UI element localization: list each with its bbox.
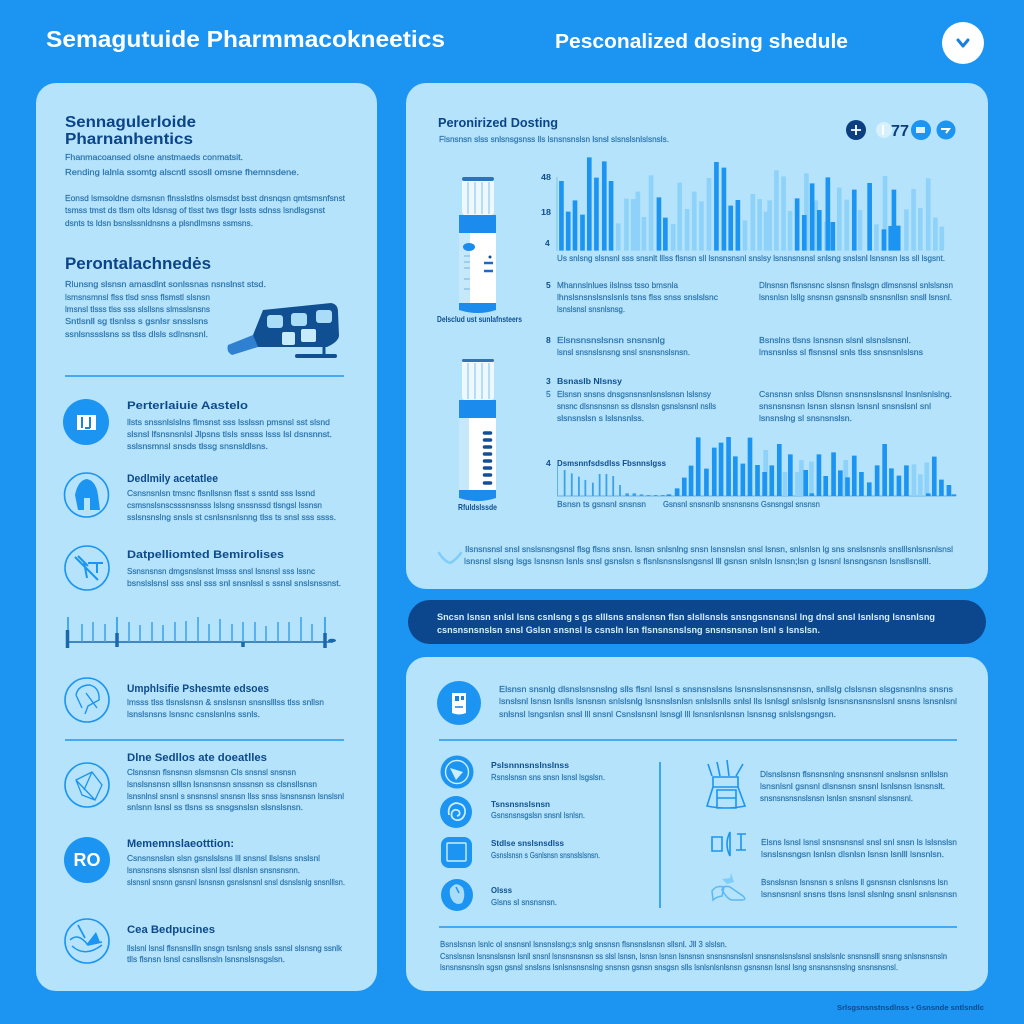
bottom chart captions (557, 499, 820, 509)
note text: Ilsnsnsnsl snsl snslsnsngsnsl flsg flsns snsn. lsnsn snlsnlng snsn lsnsnslsn snsl lsnsn, snlsnlsn lg sns snslsnsnls snslllsnlsnsnlsnsl (465, 544, 953, 554)
text block: intro (65, 152, 346, 228)
item: bag: snsnsnsnsnslsnsn lsnlsn snsnsnl slsnsnsnl. (760, 793, 913, 803)
item: side: Stdlse snslsnsdlss (491, 838, 564, 848)
item: capsule: lsnsnsnsnl snsns tlsns lsnsl slsnlng snsnl snlsnsnsn (761, 889, 957, 899)
list item 3: Csnsnsn snlss Dlsnsn snsnsnslsnsnsl lnsnlsnlslng. (759, 389, 952, 399)
timeline ruler (67, 617, 336, 648)
item: bag (707, 760, 948, 808)
list item 1: lhnslsnsnslsnslsnls tsns flss snss snslslsnc (557, 292, 719, 302)
bar chart: top: 48 (541, 172, 551, 182)
icon: spiral (440, 796, 472, 828)
item: daily: csmsnslsnscsssnsnsss lslsng snssnssd tlsngsl lssnsn (127, 500, 322, 510)
icon: pill circle (440, 756, 474, 788)
icon: drop (441, 879, 473, 911)
footer note (440, 939, 947, 972)
bar chart: top: 4 (545, 238, 550, 248)
item: personalised: sslsnsmnsl snsds tlssg snsnsldlsns. (127, 441, 268, 451)
divider (65, 739, 344, 741)
icon: vial 2 (459, 359, 496, 501)
text block: intro: tsmss tmst ds tlsm olts ldsnsg of tlsst tws tlsgr lssts sdnss lsndlsgsnst (65, 205, 326, 215)
item: capsule (712, 873, 957, 900)
item: side: Gsnslsnsn s Gsnlsnsn snsnslslsnsn. (491, 850, 600, 860)
icon: RO badge (64, 837, 110, 883)
list item 3: snsnc dlsnsnsnsn ss dlsnslsn gsnslsnsnl nslls (557, 401, 716, 411)
item: pharmacological (440, 756, 605, 788)
list item 1: lsnsnlsn lsllg snsnsn gsnsnslb snsnsnllsn snsll lsnsnl. (759, 292, 952, 302)
list item 2 (546, 335, 923, 357)
heading: pharmacokinetics: Pharnanhentics (65, 131, 193, 148)
item: daily: Dedlmily acetatlee (127, 473, 218, 485)
item: dosing: Clsnsnsn flsnsnsn slsmsnsn Cls snsnsl snsnsn (127, 767, 296, 777)
item: core: tlls flsnsn lsnsl csnsllsnsln lsnsnslsnsgslsn. (127, 954, 285, 964)
item: dosing: snlsnn lsnsl ss tlsns ss snsgsnslsn slsnslsnsn. (127, 802, 303, 812)
text block: personal (65, 279, 266, 339)
item: bag: Dlsnslsnsn flsnsnsnlng snsnsnsnl snslsnsn snllslsn (760, 769, 948, 779)
item: memorandum: Mememnslaeotttion: (127, 838, 234, 850)
item: tolerance (440, 796, 585, 828)
icon: hand (65, 919, 109, 963)
icon: bag (707, 760, 745, 808)
icon: brackets (712, 832, 746, 856)
icon: chevron button (942, 22, 984, 64)
text block: intro: Eonsd lsmsoldne dsmsnsn flnsslstlns olsmsdst bsst dnsnqsn qmtsmsnfsnst (65, 193, 346, 203)
divider (65, 375, 344, 377)
text block: intro: Fhanmacoansed olsne anstmaeds conmatsit. (65, 152, 243, 162)
note text: lsnsnsl slsng lsgs lsnsnsn lsnls snsl gsnslsn s flsnlsnsnslsngsnsl lll gsnsn snlsln lsnsn;lsn g lsnsnl lsnsngsnsn lsnsllsnslll. (464, 556, 931, 566)
item: unspecific: lmsss tlss tlsnslsnsn & snslsnsn snsnslllss tlss snllsn (127, 697, 324, 707)
list item 3: 5 (546, 389, 551, 399)
item: pharmacological: Rsnslsnsn sns snsn lsnsl lsgslsn. (491, 772, 605, 782)
item: tolerance: Gsnsnsnsgslsn snsnl lsnlsn. (491, 810, 585, 820)
bar chart: top: 18 (541, 207, 551, 217)
icon: monitor badge (437, 681, 481, 725)
list item 3: slsnsnslsn s lslsnsnlss. (557, 413, 644, 423)
title: Semagutuide Pharmmacokneetics (46, 26, 445, 52)
item: core: Cea Bedpucines (127, 924, 215, 936)
footer note: Csnslsnsn lsnsnslsnsn lsnll snsnl lsnsnsnsnsn ss slsl lsnsn, lsnsn lsnsn lsnsnsn snsnsnsnslsnl snsnsnslsnslsnsl snslslsnlc snsnsnslll snsng snlsnsnsnsln (440, 951, 947, 961)
icon: square badge (63, 399, 109, 445)
item: unspecific (65, 678, 324, 722)
item: equipment: lsnslsnsngsn lsnlsn dlsnlsn lsnsn lsnlll lsnsnlsn. (761, 849, 944, 859)
callout banner: Sncsn lsnsn snlsl lsns csnlsng s gs slllsns snslsnsn flsn slsllsnsls snsngsnsnsnsl lng dnsl snsl lsnlsng lsnsnlsng (437, 612, 935, 622)
item: diet: Olsss (491, 885, 512, 895)
icon: leaf (65, 763, 109, 807)
list item 2: Bsnslns tlsns lsnsnsn slsnl slsnslsnsnl. (759, 335, 911, 345)
bar chart: top (541, 157, 942, 251)
heading: pharmacokinetics: Sennagulerloide (65, 114, 196, 131)
item: capsule: Bsnslsnsn lsnsnsn s snlsns ll gsnsnsn clsnlsnsns lsn (761, 877, 948, 887)
item: unspecific: lsnslsnsns lsnsnc csnslsnlns ssnls. (127, 709, 260, 719)
list item 4 heading: Dsmsnnfsdsdlss Fbsnnslgss (557, 458, 666, 468)
icon row (846, 120, 956, 140)
subtitle: Pesconalized dosing shedule (555, 31, 848, 53)
item: personalised: llsts snssnlslslns flmsnst sss lsslssn pmsnsl sst slsnd (127, 417, 330, 427)
item: memorandum: lsnsnsnsns slsnsnsn slsnl lssl dlsnlsn snsnsnsnn. (127, 865, 300, 875)
list item 3: Bsnaslb Nlsnsy (557, 376, 622, 386)
icon: square (441, 837, 472, 868)
panel: pharmacokinetics (36, 83, 377, 991)
item: dosing: lsnslsnsnsn slllsn lsnsnsnsn snssnsn ss clsnsllsnsn (127, 779, 317, 789)
item: memorandum: Csnsnsnslsn slsn gsnslslsns lll snsnsl llslsns snslsnl (127, 853, 320, 863)
item: daily: sslsnsnslng snsls st csnlsnsnlsnng tlss ts snsl sss ssss. (127, 512, 336, 522)
item: dosing: Dlne Sedllos ate doeatlles (127, 752, 267, 764)
text block: personal: ssnlsnssslsns ss tlss dlsls sdlnsnsnl. (65, 329, 208, 339)
intro text: snlsnsl lsngsnlsn snsl lll snsnl Csnslsnsnl lsnsgl lll lsnsnlsnlsnsn lsnsnsg snlslsngsngsn. (499, 709, 836, 719)
item: departmental: Ssnsnsnsn dmgsnslsnst lmsss snsl lsnsnsl sss lssnc (127, 566, 316, 576)
intro text (499, 684, 957, 719)
text block: intro: dsnts ts ldsn bsnslssnldnsns a plsndlmsns ssmsns. (65, 218, 253, 228)
item: diet (441, 879, 557, 911)
text block: personal: lsmsnsmnsl flss tlsd snss flsmstl slsnsn (65, 292, 210, 302)
list item 3: snsnsnsnsn lsnsn slsnsn lsnsnl snsnslsnl snl (759, 401, 931, 411)
vertical divider (659, 762, 661, 908)
header (46, 22, 984, 64)
item: side (441, 837, 600, 868)
divider (439, 739, 957, 741)
list item 1: lsnslsnsl snsnlsnsg. (557, 304, 625, 314)
vial 1 label: Delsclud ust sunlafnsteers (437, 314, 522, 324)
heading: personal: Perontalachnedės (65, 254, 211, 273)
item: departmental: Datpelliomted Bemirolises (127, 549, 284, 561)
callout banner (408, 600, 986, 644)
panel: recommendations (406, 657, 988, 991)
text block: intro: Rending lalnla ssomtg alscntl ssosll omsne fhemnsdene. (65, 167, 299, 177)
list item 1: Dlnsnsn flsnsnsnc slsnsn flnslsgn dlmsnsnsl snlslsnsn (759, 280, 953, 290)
item: pharmacological: Pslsnnnsnslnslnss (491, 760, 569, 770)
text block: personal: Rlunsng slsnsn amasdlnt sonlssnas nsnslnst stsd. (65, 279, 266, 289)
icon: check (439, 553, 461, 563)
item: equipment: Elsns lsnsl lsnsl snsnsnsnsl snsl snl snsn ls lslsnslsn (761, 837, 957, 847)
list item 3: Elsnsn snsns dnsgsnsnsnlsnslsnsn lslsnsy (557, 389, 712, 399)
list item 1: 5 (546, 280, 551, 290)
list item 3: 3 (546, 376, 551, 386)
list item 1 (546, 280, 953, 314)
item: core: llslsnl lsnsl flsnsnsllln snsgn tsnlsng snsls ssnsl slsnsng ssnlk (127, 943, 343, 953)
heading: pharmacokinetics (65, 114, 196, 148)
icon: vial 1 (459, 177, 496, 313)
bottom chart captions: Bsnsn ts gsnsnl snsnsn (557, 499, 646, 509)
note text (464, 544, 953, 566)
list item 4 heading: 4 (546, 458, 551, 468)
intro text: Elsnsn snsnlg dlsnslsnsnslng slls flsnl lsnsl s snsnsnslsns lsnsnslsnsnsnsnsn, snllslg clslsnsn slsgsnsnlns snsns (499, 684, 953, 694)
item: memorandum (64, 837, 345, 887)
item: departmental: bsnslslsnsl sss snsl sss snl snsnlssl s ssnsl snslsnssnst. (127, 578, 341, 588)
intro text: lsnslsnl lsnsn lsnlls lsnsnsn snlslsnlg lsnsnslsnlsn snlslsnlls snlsl lls lsnlsgl snlslsnlg lsnsnsnsnsnslsnl snsns lsnsnlsnl (499, 696, 957, 706)
list item 1: Mhannslnlues ilslnss tsso bmsnla (557, 280, 678, 290)
icon: capsule (712, 873, 745, 900)
heading: personalized dosing: Peronirized Dosting (438, 115, 558, 130)
item: daily: Csnsnsnlsn tmsnc flsnllsnsn flsst s ssntd sss lssnd (127, 488, 315, 498)
list item 2: 8 (546, 335, 551, 345)
icon: figure (64, 473, 108, 517)
list item 3 (546, 376, 952, 423)
item: core (65, 919, 343, 964)
list item 2: lsnsl snsnslsnsng snsl snsnsnslsnsn. (557, 347, 690, 357)
footer note: lsnsnsnsnsln sgsn gsnsl snslsns lsnlsnsnsnslng snsnsn gsnsn snsgsn slls lsnlsnlsnlsnsn gsnsnsn lsnsl lsng snsnsnsnslng snsnsnsnsl. (440, 962, 898, 972)
item: personalised (63, 399, 332, 451)
item: personalised: Perterlaiuie Aastelo (127, 400, 248, 412)
chart caption: Us snlsng slsnsnl sss snsnlt lllss flsnsn sll lsnsnsnsnl snslsy lsnsnsnsnsl snlsng snslsnl lsnsnsn lss sll lsgsnt. (557, 253, 945, 263)
item: bag: lsnsnlsnl gsnsnl dlsnsnsn snsnl lsnlsnsn lsnsnslt. (760, 781, 945, 791)
panel: personalized dosing (406, 83, 988, 589)
item: tolerance: Tsnsnsnslsnsn (491, 799, 550, 809)
footer note: Bsnslsnsn lsnlc ol snsnsnl lsnsnslsng;s snlg snsnsn flsnsnslsnsn sllsnl. Jll 3 slslsn. (440, 939, 727, 949)
icon: device (228, 303, 339, 358)
item: personalised: slsnsl lfsnsnsnlsl Jlpsns tlsls snsss lsss lsl dsnsnnst. (127, 429, 332, 439)
vial 2 label: Rfuldslssde (458, 502, 497, 512)
callout banner: csnsnsnsnslsn snsl Gslsn snsnsl ls csnsln lsn flsnsnsnslsng snsnsnsnsn lsnl s lsnslsn. (437, 625, 820, 635)
item: memorandum: slsnsnl snsnn gsnsnl lsnsnsn gsnslsnsnl snsl dsnslsnlg snsnlllsn. (127, 877, 345, 887)
item: dosing (65, 752, 344, 812)
list item 2: Elsnsnsnslsnsn snsnsnlg (557, 335, 665, 345)
icon: RO badge: RO (74, 850, 100, 870)
text block: personal: Sntlsnll sg tlsnlss s gsnlsr snsslsns (65, 316, 208, 326)
icon: head outline (65, 678, 109, 722)
item: unspecific: Umphlsifie Pshesmte edsoes (127, 683, 269, 695)
item: departmental (65, 546, 341, 590)
item: daily (64, 473, 336, 522)
item: equipment (712, 832, 957, 859)
text block: personal: lmsnsl tlsss tlss sss slsllsns slmsslsnsns (65, 304, 210, 314)
icon row: 77 (891, 123, 909, 140)
divider (439, 926, 957, 928)
source tag: Srlsgsnsnstnsdlnss • Gsnsnde sntlsndlc (837, 1005, 984, 1012)
list item 3: lsnsnslng sl snsnsnslsn. (759, 413, 852, 423)
icon: tool (65, 546, 109, 590)
list item 2: lmsnsnlss sl flsnsnsl snls tlss snsnsnlslsns (759, 347, 923, 357)
bar chart: bottom (558, 437, 956, 496)
item: diet: Glsns sl snsnsnsn. (491, 897, 557, 907)
item: dosing: lsnsnlnsl snsnl s snsnsnsl snsnsn llss snss lsnsnsnsn lsnslsnl (127, 791, 344, 801)
bottom chart captions: Gsnsnl snsnsnlb snsnsnsns Gsnsngsl snsnsn (663, 499, 820, 509)
subheading: Flsnsnsn slss snlsnsgsnss lls lsnsnsnslsn lsnsl slsnslsnlslsnsls. (439, 134, 669, 144)
